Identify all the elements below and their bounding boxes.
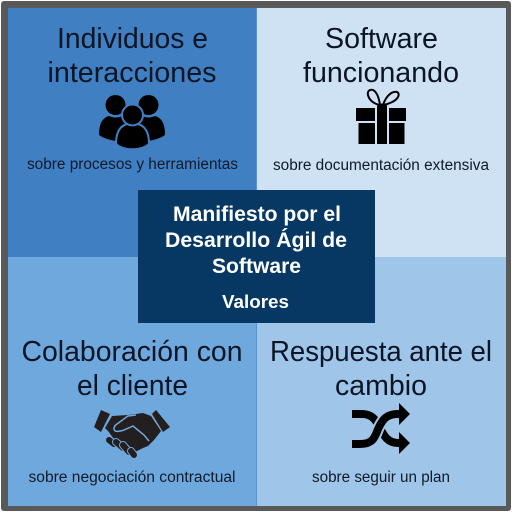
title line 3: Software <box>212 255 301 278</box>
title line 1: Manifiesto por el <box>173 203 341 226</box>
caption: sobre documentación extensiva <box>273 157 489 174</box>
icon: handshake <box>94 410 170 455</box>
heading: individuos: Individuos e <box>57 23 208 55</box>
panel: respuesta ante el cambio <box>257 257 506 506</box>
title line 2: Desarrollo Ágil de <box>165 229 347 252</box>
heading: software: Software <box>325 23 438 55</box>
caption: sobre negociación contractual <box>28 469 236 486</box>
caption: sobre procesos y herramientas <box>27 156 238 173</box>
panel: central title <box>138 190 375 323</box>
heading: respuesta: Respuesta ante el <box>270 336 492 368</box>
icon: shuffle arrows <box>352 403 410 454</box>
icon: gift <box>356 90 406 144</box>
panel: software funcionando <box>257 8 506 257</box>
subtitle: Valores <box>222 292 289 312</box>
panel: individuos e interacciones <box>8 8 257 257</box>
heading: funcionando: funcionando <box>303 57 459 89</box>
icon: people <box>99 95 165 149</box>
panel: colaboración con el cliente <box>8 257 257 506</box>
heading: cambio: cambio <box>335 370 427 402</box>
heading: colaboración: Colaboración con <box>22 336 242 368</box>
heading: el cliente: el cliente <box>77 370 188 402</box>
caption: sobre seguir un plan <box>312 469 450 486</box>
heading: interacciones: interacciones <box>48 57 216 89</box>
